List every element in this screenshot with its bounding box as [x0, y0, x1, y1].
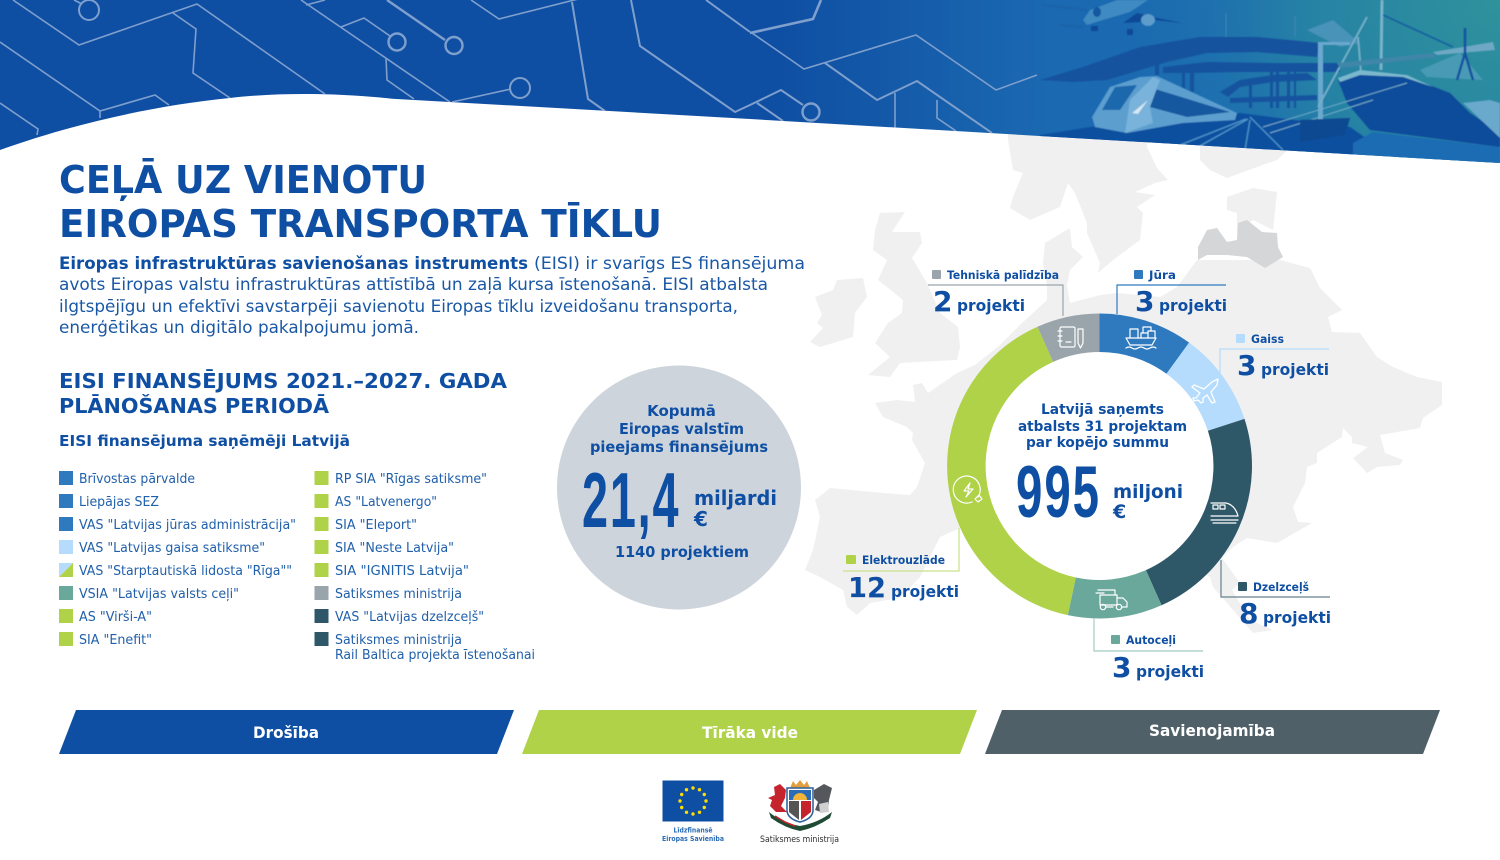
- legend: recipients column 1: VAS "Starptautiskā lidosta "Rīga"": [79, 564, 292, 579]
- legend: recipients column 2: Satiksmes ministrija: [335, 587, 462, 602]
- logo: EU flag: Līdzfinansē: [674, 826, 713, 834]
- section heading: EISI FINANSĒJUMS 2021.–2027. GADA: [59, 368, 507, 393]
- label: Autoceļi: Autoceļi: [1126, 633, 1176, 647]
- legend: recipients column 1: SIA "Enefit": [79, 633, 152, 648]
- banner: Drošība: Drošība: [253, 723, 319, 742]
- intro paragraph: enerģētikas un digitālo pakalpojumu jomā.: [59, 318, 419, 338]
- label: Dzelzceļš: 8: [1239, 597, 1258, 630]
- map: Latvia highlighted: [1198, 220, 1283, 268]
- logo: EU flag: Eiropas Savienība: [662, 835, 724, 843]
- photo: train: [1092, 76, 1237, 133]
- logo: Latvian coat of arms and ministry name: Satiksmes ministrija: [760, 835, 839, 845]
- legend: recipients column 1: VAS "Latvijas gaisa satiksme": [79, 541, 265, 556]
- legend: recipients column 1: VAS "Latvijas jūras administrācija": [79, 518, 296, 533]
- legend: recipients column 2: SIA "IGNITIS Latvija": [335, 564, 469, 579]
- banner: Drošība: [59, 710, 514, 754]
- donut centre text: atbalsts 31 projektam: [1018, 419, 1187, 435]
- donut centre text: 995: [1016, 452, 1101, 534]
- photo: port cranes and ship: [1263, 0, 1500, 170]
- title: [59, 158, 662, 246]
- legend: recipients column 2: AS "Latvenergo": [335, 495, 437, 510]
- legend: recipients column 2: SIA "Eleport": [335, 518, 417, 533]
- section heading: [59, 368, 507, 418]
- title: EIROPAS TRANSPORTA TĪKLU: [59, 202, 662, 246]
- legend: recipients column 1: VSIA "Latvijas valsts ceļi": [79, 587, 239, 602]
- label: Gaiss: 3: [1237, 349, 1256, 382]
- donut centre text: miljoni: [1113, 481, 1183, 503]
- legend heading: EISI finansējuma saņēmēji Latvijā: [59, 432, 350, 450]
- banner: Savienojamība: Savienojamība: [1149, 721, 1275, 740]
- logo: Latvian coat of arms and ministry name: [760, 780, 839, 845]
- legend: recipients column 1: AS "Virši-A": [79, 610, 152, 625]
- legend: recipients column 1: [59, 471, 296, 648]
- banner: Tīrāka vide: Tīrāka vide: [702, 723, 798, 742]
- label: Dzelzceļš: Dzelzceļš: [1253, 580, 1309, 594]
- label: Autoceļi: 3: [1112, 651, 1131, 684]
- photo collage: [1040, 0, 1500, 170]
- label: Gaiss: [1220, 332, 1329, 382]
- label: Jūra: projekti: [1159, 296, 1227, 315]
- photo: airplane: [1043, 0, 1182, 35]
- donut chart: [953, 327, 1238, 610]
- legend: recipients column 2: [314, 471, 535, 663]
- donut centre text: [1016, 402, 1187, 534]
- total funding circle: [557, 366, 801, 610]
- banner: Tīrāka vide: [522, 710, 977, 754]
- photo: ground: [1040, 112, 1364, 154]
- total funding circle: 1140 projektiem: [615, 543, 749, 561]
- legend: recipients column 2: VAS "Latvijas dzelzceļš": [335, 610, 484, 625]
- legend: recipients column 2: Rail Baltica projekta īstenošanai: [335, 648, 535, 663]
- label: Elektrouzlāde: Elektrouzlāde: [862, 553, 945, 567]
- intro paragraph: avots Eiropas valstu infrastruktūras attīstībā un zaļā kursa īstenošanā. EISI atbalsta: [59, 275, 768, 295]
- label: Tehniskā palīdzība: Tehniskā palīdzība: [947, 268, 1059, 282]
- total funding circle: Kopumā: [647, 402, 716, 420]
- label: Dzelzceļš: projekti: [1263, 608, 1331, 627]
- photo: rail tracks: [1180, 117, 1283, 150]
- map of Europe: [805, 130, 1442, 633]
- segment: Dzelzceļš: [1154, 425, 1238, 588]
- label: Elektrouzlāde: [843, 528, 959, 604]
- logo: EU flag: [662, 780, 724, 843]
- section heading: PLĀNOŠANAS PERIODĀ: [59, 393, 329, 418]
- label: Autoceļi: [1094, 618, 1204, 684]
- intro paragraph: (EISI) ir svarīgs ES finansējuma: [534, 254, 805, 274]
- label: Autoceļi: projekti: [1136, 662, 1204, 681]
- intro paragraph: Eiropas infrastruktūras savienošanas instruments: [59, 254, 528, 274]
- label: Tehniskā palīdzība: projekti: [957, 296, 1025, 315]
- label: Tehniskā palīdzība: [928, 268, 1063, 318]
- segment: Autoceļi: [1072, 588, 1154, 610]
- photo: station roof: [1040, 37, 1340, 108]
- legend: recipients column 1: Brīvostas pārvalde: [79, 472, 195, 487]
- segment: Elektrouzlāde: [953, 344, 1072, 596]
- legend: recipients column 1: Liepājas SEZ: [79, 495, 159, 510]
- segment: Jūra: [1100, 327, 1178, 358]
- label: Tehniskā palīdzība: 2: [933, 285, 952, 318]
- total funding circle: Eiropas valstīm: [619, 420, 744, 438]
- intro paragraph: [59, 254, 805, 338]
- segment: Tehniskā palīdzība: [1045, 327, 1100, 348]
- label: Jūra: Jūra: [1148, 268, 1176, 282]
- label: Jūra: 3: [1135, 285, 1154, 318]
- title: CEĻĀ UZ VIENOTU: [59, 158, 427, 202]
- label: Elektrouzlāde: 12: [848, 571, 886, 604]
- circuit lines: [0, 0, 1037, 135]
- label: Dzelzceļš: [1221, 560, 1331, 630]
- label: Elektrouzlāde: projekti: [891, 582, 959, 601]
- banner: Savienojamība: [985, 710, 1440, 754]
- total funding circle: miljardi: [694, 486, 777, 510]
- total funding circle: pieejams finansējums: [590, 438, 768, 456]
- donut centre text: €: [1112, 501, 1126, 523]
- donut centre text: par kopējo summu: [1026, 435, 1169, 451]
- total funding circle: 21,4: [582, 457, 680, 544]
- segment: Gaiss: [1178, 358, 1226, 425]
- label: Gaiss: projekti: [1261, 360, 1329, 379]
- donut centre text: Latvijā saņemts: [1041, 402, 1164, 418]
- intro paragraph: ilgtspējīgu un efektīvi savstarpēji savienotu Eiropas tīklu izveidošanu transporta,: [59, 297, 738, 317]
- legend: recipients column 2: SIA "Neste Latvija": [335, 541, 454, 556]
- label: Gaiss: Gaiss: [1251, 332, 1284, 346]
- legend: recipients column 2: RP SIA "Rīgas satiksme": [335, 472, 487, 487]
- legend: recipients column 2: Satiksmes ministrija: [335, 633, 462, 648]
- total funding circle: €: [693, 507, 708, 531]
- label: Jūra: [1117, 268, 1227, 318]
- header banner: [0, 0, 1500, 170]
